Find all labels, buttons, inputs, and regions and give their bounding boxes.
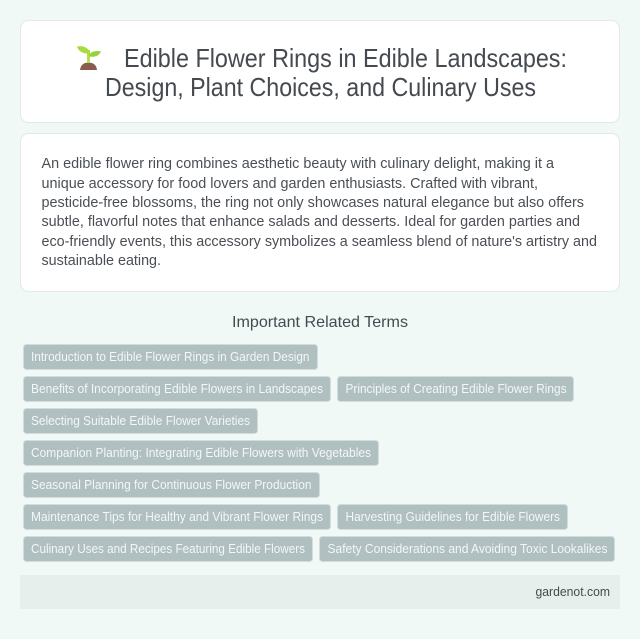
- tag: companion planting: [24, 440, 378, 466]
- footer bar: [20, 575, 620, 609]
- tag: introduction: [24, 344, 318, 370]
- tag: seasonal planning: [24, 472, 320, 498]
- tag: benefits: Benefits of Incorporating Edible Flowers in Landscapes: [31, 382, 323, 396]
- description text: sustainable eating.: [42, 252, 161, 269]
- description text: eco-friendly events, this accessory symbolizes a seamless blend of nature's artistry and: [42, 233, 597, 250]
- title: Design, Plant Choices, and Culinary Uses: [105, 72, 536, 102]
- title: Edible Flower Rings in Edible Landscapes:: [124, 43, 567, 73]
- icon: seedling: [77, 46, 101, 70]
- description text: An edible flower ring combines aesthetic beauty with culinary delight, making it a: [42, 155, 555, 172]
- tag: varieties: Selecting Suitable Edible Flower Varieties: [31, 414, 250, 428]
- panel: title card: [20, 20, 620, 122]
- tag: culinary uses: Culinary Uses and Recipes Featuring Edible Flowers: [31, 542, 305, 556]
- tag: safety: [320, 536, 614, 562]
- tag: maintenance: [24, 504, 330, 530]
- panel: description card: [20, 134, 620, 292]
- tag: culinary uses: [24, 536, 312, 562]
- tag: safety: Safety Considerations and Avoiding Toxic Lookalikes: [328, 542, 608, 556]
- tag: benefits: [24, 376, 330, 402]
- tag: varieties: [24, 408, 258, 434]
- description text: subtle, flavorful notes that enhance salads and desserts. Ideal for garden parties and: [42, 213, 580, 230]
- description text: unique accessory for food lovers and garden enthusiasts. Crafted with vibrant,: [42, 175, 538, 192]
- heading: related terms: Important Related Terms: [232, 314, 408, 331]
- tag: harvesting: Harvesting Guidelines for Edible Flowers: [346, 510, 560, 524]
- tag: principles: [338, 376, 574, 402]
- tag: introduction: Introduction to Edible Flower Rings in Garden Design: [31, 350, 310, 364]
- title: [105, 43, 567, 102]
- tag: harvesting: [338, 504, 568, 530]
- tag: companion planting: Companion Planting: Integrating Edible Flowers with Vegetables: [31, 446, 371, 460]
- tag: seasonal planning: Seasonal Planning for Continuous Flower Production: [31, 478, 312, 492]
- description text: [42, 155, 597, 269]
- description text: pesticide-free blossoms, the ring not only showcases natural elegance but also offers: [42, 194, 584, 211]
- tag: maintenance: Maintenance Tips for Healthy and Vibrant Flower Rings: [31, 510, 323, 524]
- tag: principles: Principles of Creating Edible Flower Rings: [346, 382, 566, 396]
- footer source text: gardenot.com: [536, 585, 610, 599]
- panel: related term tags: [24, 344, 614, 562]
